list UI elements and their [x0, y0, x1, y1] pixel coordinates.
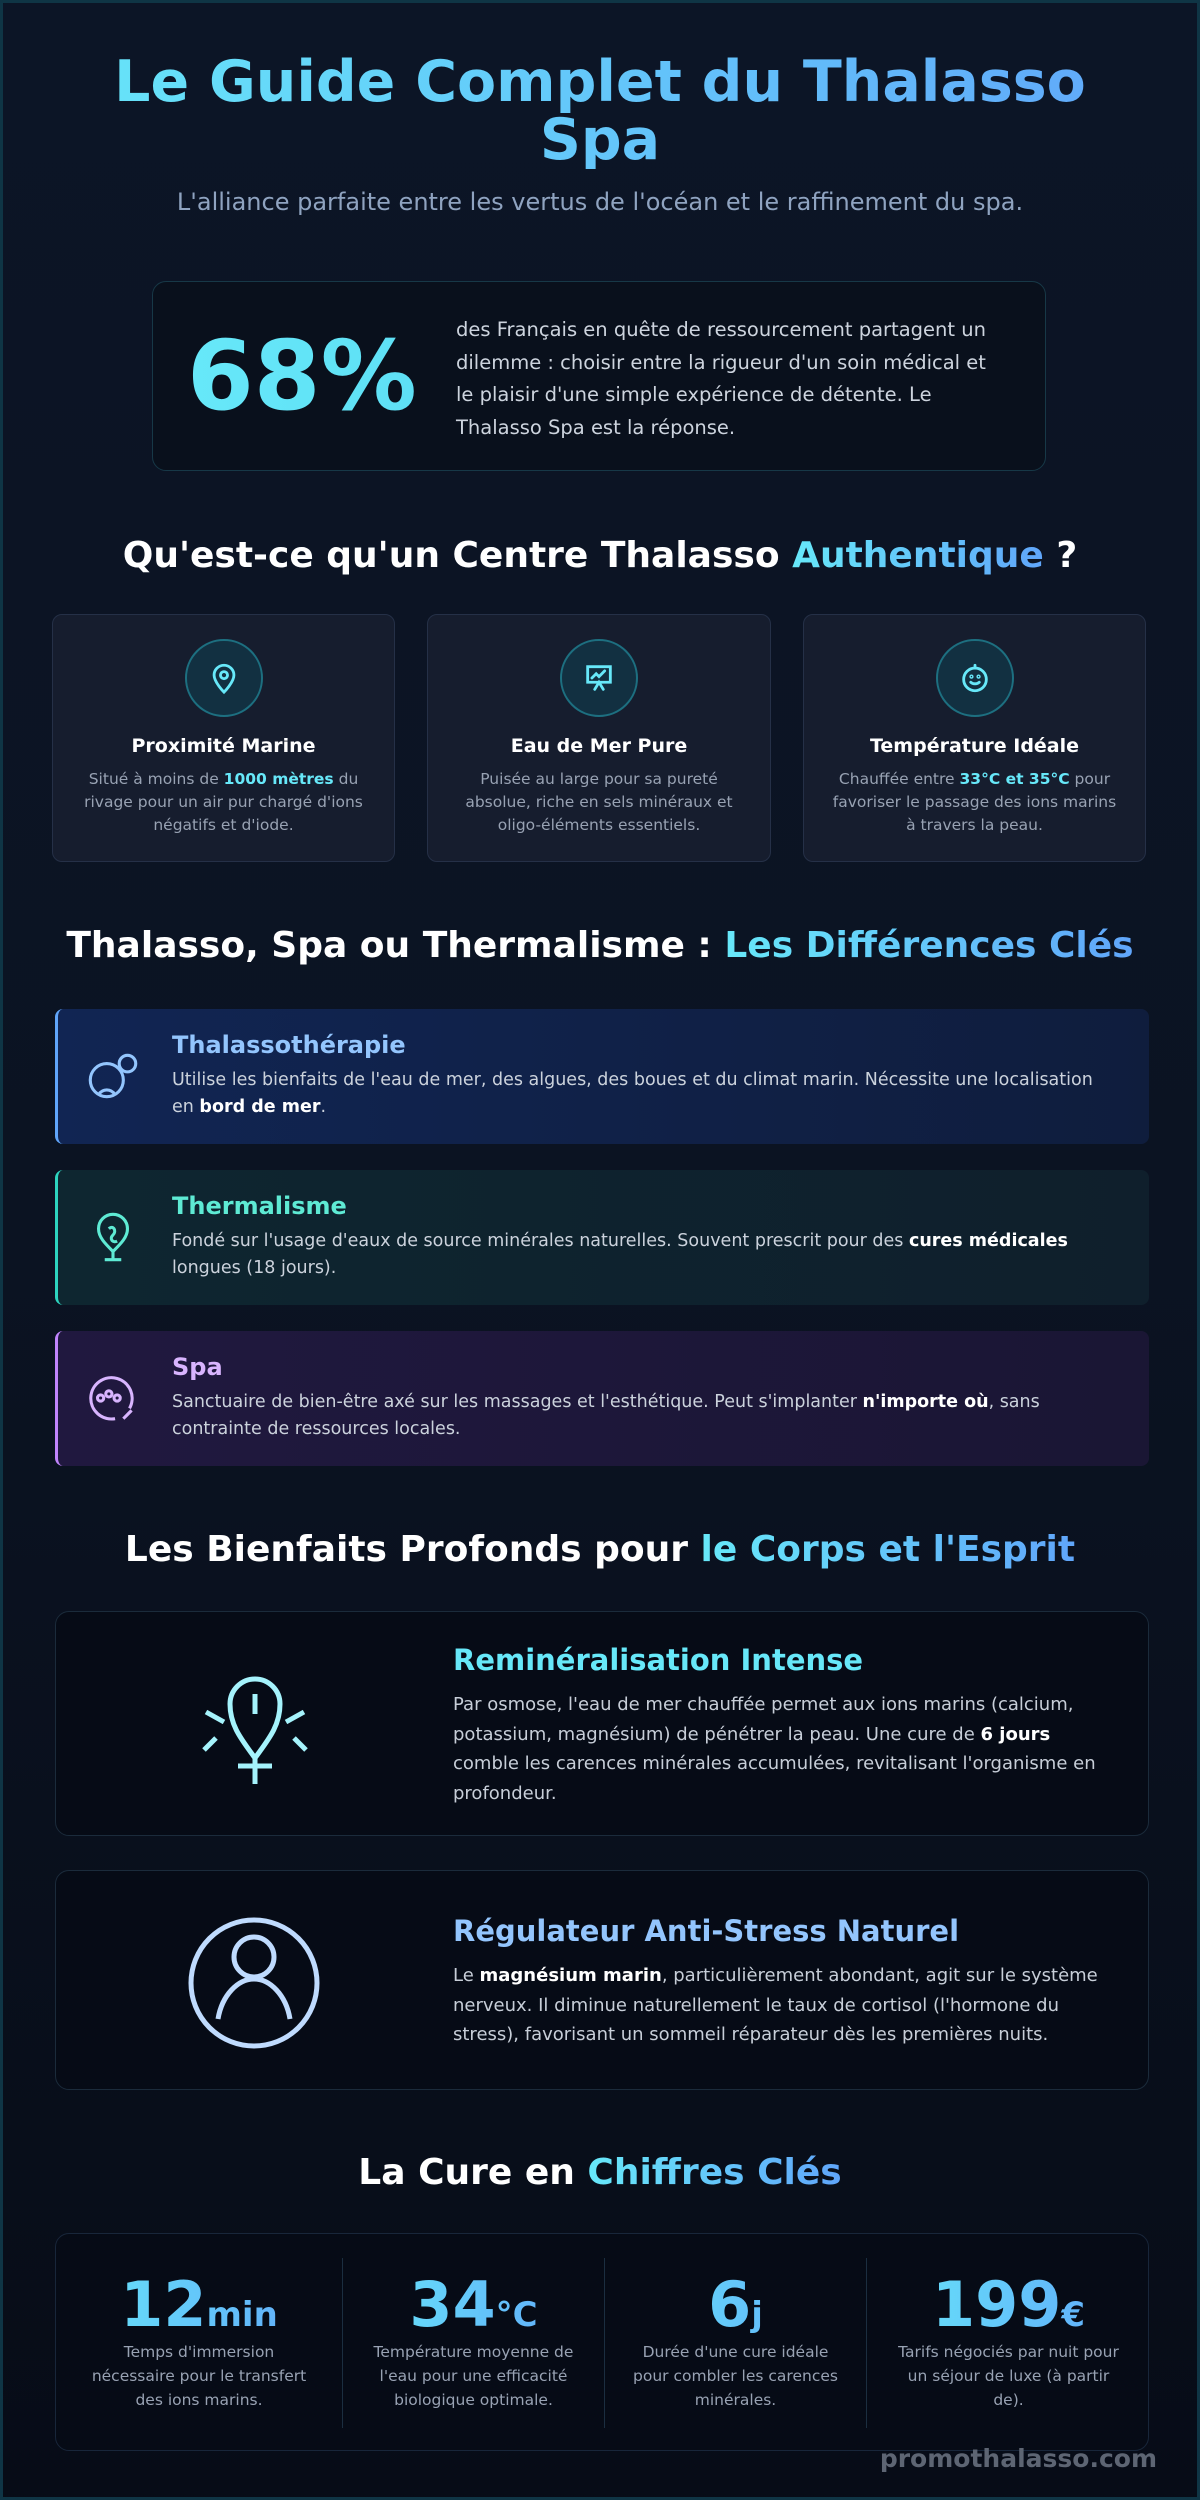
- row: thermalisme: Thermalisme: [172, 1192, 347, 1220]
- card: température idéale: [803, 614, 1146, 862]
- benefit: anti-stress: [55, 1870, 1149, 2090]
- heading: authentique: Qu'est-ce qu'un Centre Thalasso Authentique ?: [123, 535, 1077, 576]
- figure: 12min: Temps d'immersion nécessaire pour le transfert des ions marins.: [92, 2343, 306, 2409]
- heading: chiffres: La Cure en Chiffres Clés: [358, 2152, 842, 2193]
- benefit: anti-stress: Le magnésium marin, particulièrement abondant, agit sur le système nerveux. Il diminue naturellement le taux de cortisol (l'hormone du stress), favorisant un sommeil réparateur dès les premières nuits.: [453, 1965, 1098, 2045]
- footer brand: promothalasso.com: [880, 2444, 1157, 2473]
- heading: bienfaits: Les Bienfaits Profonds pour le Corps et l'Esprit: [125, 1529, 1075, 1570]
- figure: 199€: Tarifs négociés par nuit pour un séjour de luxe (à partir de).: [898, 2343, 1119, 2409]
- card: proximité marine: Proximité Marine: [131, 735, 316, 757]
- figure: 34°C: Température moyenne de l'eau pour une efficacité biologique optimale.: [374, 2343, 573, 2409]
- figure: 6j: Durée d'une cure idéale pour combler les carences minérales.: [633, 2343, 838, 2409]
- icon: location pin: [184, 639, 262, 717]
- row: spa: Sanctuaire de bien-être axé sur les massages et l'esthétique. Peut s'implanter n'importe où, sans contrainte de ressources locales.: [172, 1392, 1040, 1439]
- row: spa: Spa: [172, 1353, 223, 1381]
- figure: 34°C: 34°C: [409, 2268, 538, 2341]
- card: eau de mer pure: Puisée au large pour sa pureté absolue, riche en sels minéraux et oligo-éléments essentiels.: [465, 770, 733, 834]
- benefit: anti-stress: Régulateur Anti-Stress Naturel: [453, 1914, 959, 1948]
- benefit: reminéralisation: Reminéralisation Intense: [453, 1643, 863, 1677]
- icon: spring: [97, 1212, 129, 1262]
- benefit: reminéralisation: [55, 1611, 1149, 1836]
- icon: lightbulb drop: [202, 1676, 308, 1784]
- figure: 6j: [604, 2258, 866, 2428]
- card: température idéale: Chauffée entre 33°C et 35°C pour favoriser le passage des ions marins à travers la peau.: [833, 770, 1116, 834]
- figure: 199€: [866, 2258, 1150, 2428]
- row: thalassothérapie: Utilise les bienfaits de l'eau de mer, des algues, des boues et du climat marin. Nécessite une localisation en bord de mer.: [172, 1070, 1093, 1117]
- icon: bubbles: [88, 1054, 138, 1098]
- card: proximité marine: [52, 614, 395, 862]
- card: eau de mer pure: [427, 614, 771, 862]
- key figures panel: [55, 2233, 1149, 2451]
- icon: spa stones: [89, 1376, 134, 1420]
- figure: 34°C: [342, 2258, 604, 2428]
- card: eau de mer pure: Eau de Mer Pure: [511, 735, 687, 757]
- figure: 12min: [92, 2268, 306, 2409]
- icon: person circle: [188, 1918, 320, 2048]
- card: proximité marine: Situé à moins de 1000 mètres du rivage pour un air pur chargé d'ions négatifs et d'iode.: [84, 770, 363, 834]
- title: Spa: [540, 107, 660, 173]
- title: Le Guide Complet du Thalasso: [114, 49, 1086, 115]
- row: thalassothérapie: [55, 1009, 1149, 1144]
- title: [3, 53, 1197, 169]
- big number: 68%: [187, 320, 417, 432]
- row: spa: [55, 1331, 1149, 1466]
- row: thermalisme: Fondé sur l'usage d'eaux de source minérales naturelles. Souvent prescrit pour des cures médicales longues (18 jours).: [172, 1231, 1068, 1278]
- subtitle: L'alliance parfaite entre les vertus de l'océan et le raffinement du spa.: [177, 188, 1023, 216]
- row: thermalisme: [55, 1170, 1149, 1305]
- stat callout: 68%: [152, 281, 1046, 471]
- icon: smiley: [936, 639, 1014, 717]
- benefit: reminéralisation: Par osmose, l'eau de mer chauffée permet aux ions marins (calcium, potassium, magnésium) de pénétrer la peau. Une cure de 6 jours comble les carences minérales accumulées, revitalisant l'organisme en profondeur.: [453, 1694, 1096, 1804]
- row: thalassothérapie: Thalassothérapie: [172, 1031, 406, 1059]
- stat text: des Français en quête de ressourcement partagent un dilemme : choisir entre la rigueur d'un soin médical et le plaisir d'une simple expérience de détente. Le Thalasso Spa est la réponse.: [456, 318, 986, 438]
- card: température idéale: Température Idéale: [870, 735, 1079, 757]
- figure: 12min: 12min: [120, 2268, 278, 2341]
- figure: 199€: 199€: [932, 2268, 1085, 2341]
- heading: différences: Thalasso, Spa ou Thermalisme : Les Différences Clés: [66, 925, 1134, 966]
- icon: chart board: [560, 639, 638, 717]
- figure: 6j: 6j: [708, 2268, 763, 2341]
